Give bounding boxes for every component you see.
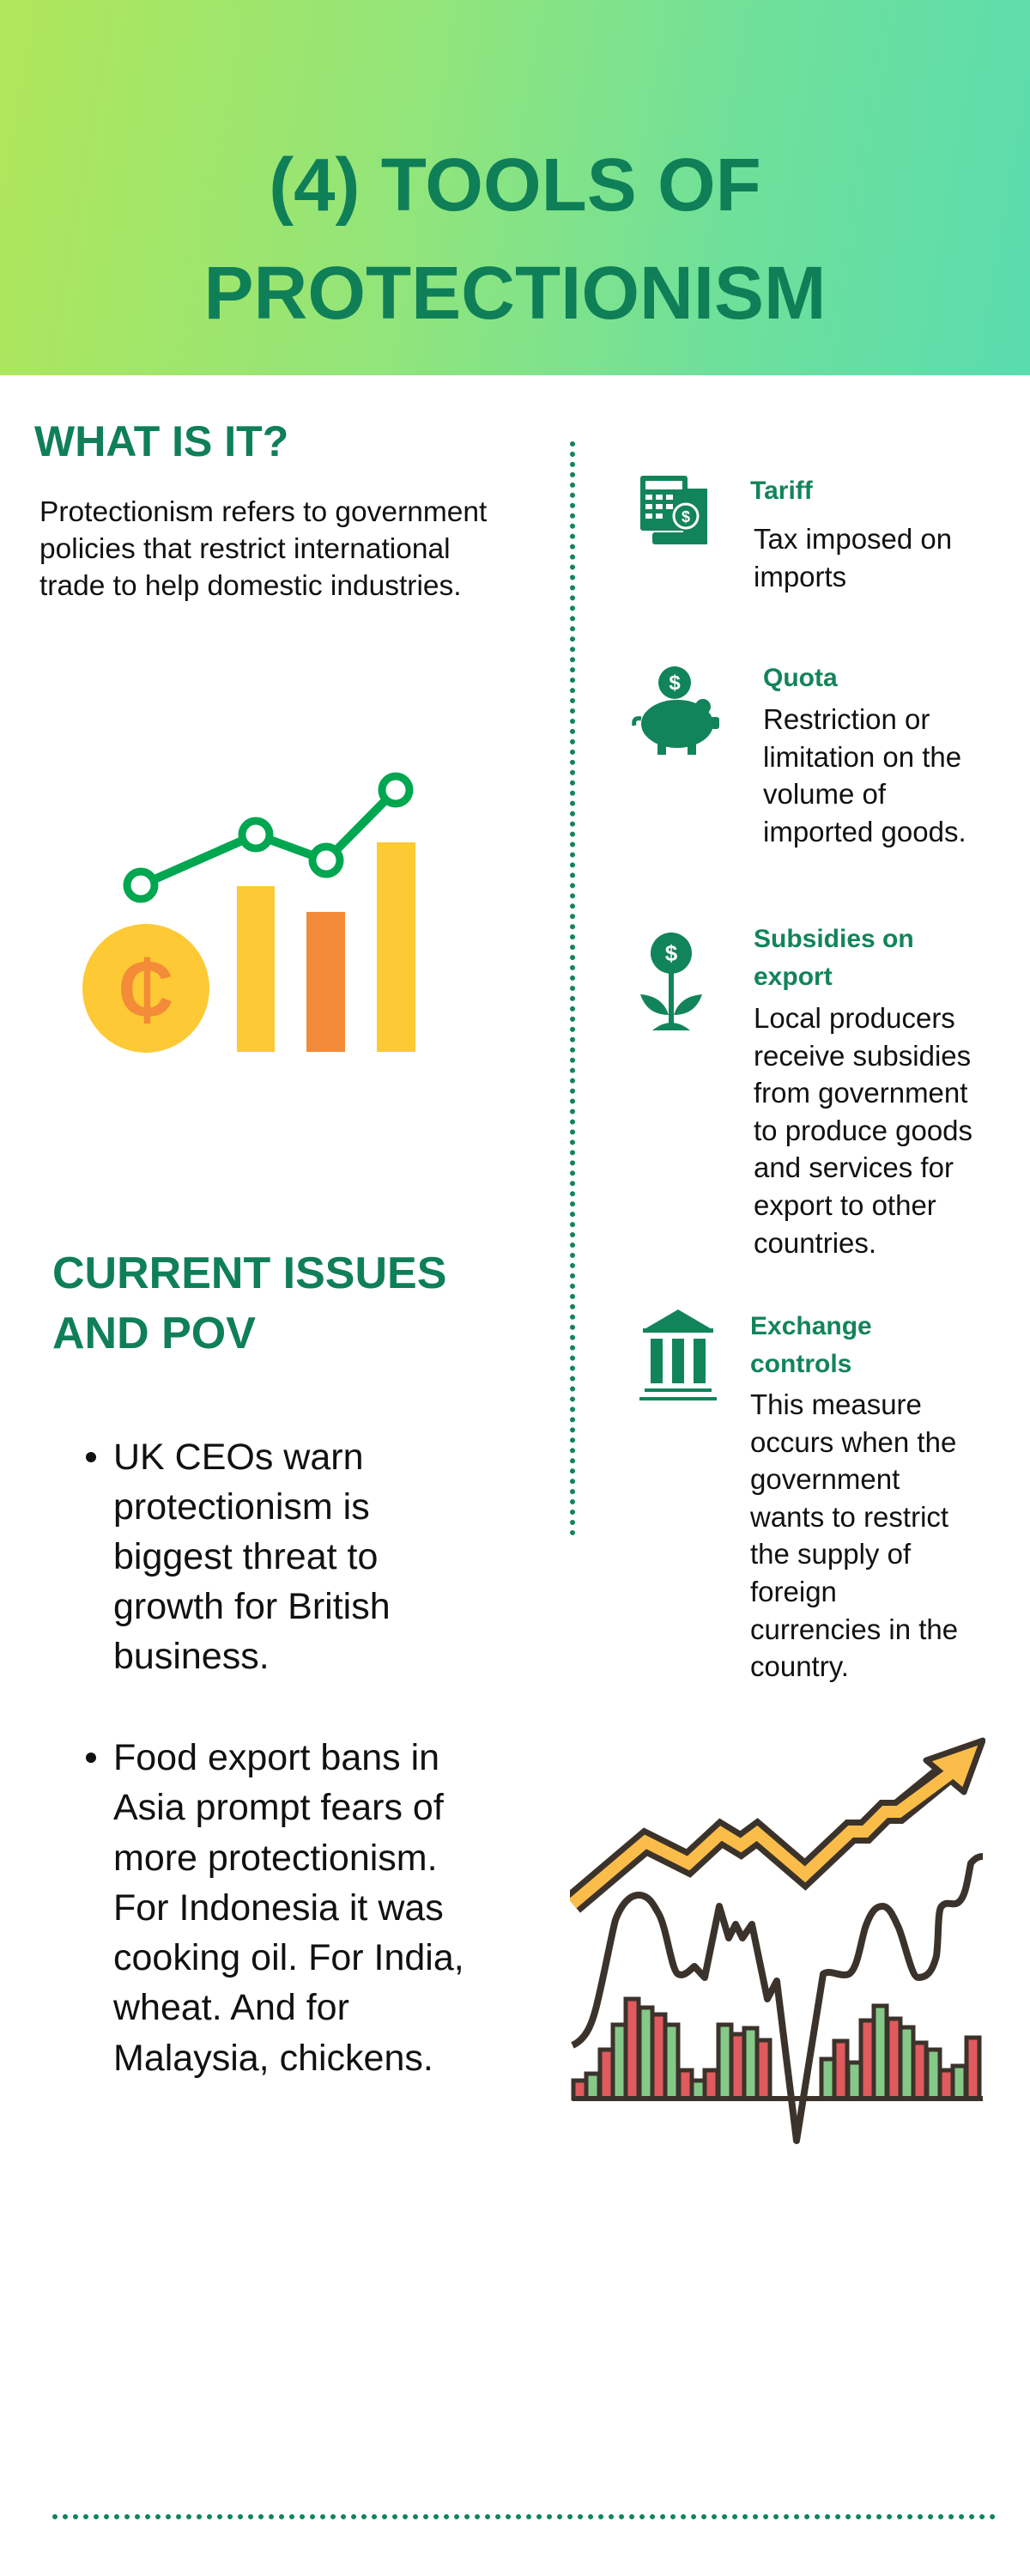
text: imported goods.: [763, 816, 966, 847]
item: quota: Quota: [763, 664, 838, 692]
item: tariff: Tariff: [750, 477, 813, 505]
title: (4) TOOLS OF: [269, 143, 761, 227]
heading: current issues and pov: CURRENT ISSUES: [52, 1249, 446, 1298]
text: country.: [750, 1650, 849, 1682]
icon: subsidies plant: $: [665, 940, 678, 966]
text: the supply of: [750, 1538, 911, 1570]
icon: tariff calculator: [640, 476, 707, 544]
item: exchange controls: controls: [750, 1350, 851, 1378]
item: exchange controls: Exchange: [750, 1312, 872, 1340]
icon: quota piggy bank: [632, 666, 719, 755]
text: countries.: [754, 1227, 876, 1259]
bullet: food export bans: Food export bans in: [113, 1737, 439, 1778]
text: This measure: [750, 1388, 922, 1420]
text: volume of: [763, 778, 886, 810]
illustration: growth chart with coin: [82, 773, 415, 1053]
text: definition: policies that restrict international: [39, 533, 451, 565]
heading: current issues and pov: AND POV: [52, 1309, 256, 1358]
text: receive subsidies: [754, 1040, 971, 1072]
text: limitation on the: [763, 740, 961, 773]
text: from government: [754, 1077, 967, 1109]
icon: exchange controls bank: [639, 1309, 717, 1400]
bullet: UK CEOs: growth for British: [113, 1586, 391, 1627]
item: quota: [763, 664, 966, 848]
bullet: food export bans: [86, 1737, 464, 2079]
icon: tariff calculator: $: [682, 508, 690, 526]
bullet: UK CEOs: biggest threat to: [113, 1536, 378, 1577]
text: export to other: [754, 1189, 936, 1221]
title: [203, 143, 826, 335]
icon: subsidies plant: [640, 933, 702, 1030]
text: Local producers: [754, 1002, 955, 1034]
divider: vertical dotted: [570, 441, 575, 1536]
text: Tax imposed on: [754, 523, 952, 555]
title: PROTECTIONISM: [203, 252, 826, 335]
bullet: food export bans: wheat. And for: [113, 1987, 349, 2028]
bullet: food export bans: For Indonesia it was: [113, 1887, 444, 1929]
bullet: food export bans: Asia prompt fears of: [113, 1787, 444, 1828]
text: currencies in the: [750, 1613, 958, 1645]
bullet: UK CEOs: business.: [113, 1636, 270, 1677]
bullet: UK CEOs: protectionism is: [113, 1486, 370, 1528]
bullet: UK CEOs: UK CEOs warn: [113, 1437, 364, 1478]
heading: what is it: WHAT IS IT?: [34, 417, 288, 465]
text: Restriction or: [763, 703, 930, 735]
text: definition: [39, 496, 488, 602]
bullet: food export bans: more protectionism.: [113, 1838, 438, 1879]
text: definition: Protectionism refers to government: [39, 496, 487, 528]
item: tariff: [750, 477, 952, 592]
item: subsidies on export: export: [754, 963, 833, 991]
item: exchange controls: [750, 1312, 958, 1682]
heading: current issues and pov: [52, 1249, 446, 1358]
text: occurs when the: [750, 1426, 956, 1458]
item: subsidies on export: Subsidies on: [754, 925, 914, 953]
divider: bottom dotted: [52, 2514, 996, 2519]
illustration: stock market chart: [570, 1738, 985, 2144]
icon: quota piggy bank: $: [669, 671, 681, 695]
text: foreign: [750, 1576, 837, 1607]
text: wants to restrict: [750, 1501, 948, 1533]
header banner: [0, 0, 1030, 375]
illustration: growth chart with coin: ₵: [118, 947, 173, 1033]
bullet: food export bans: cooking oil. For India,: [113, 1937, 464, 1978]
text: government: [750, 1463, 900, 1495]
item: subsidies on export: [754, 925, 972, 1259]
bullet: food export bans: Malaysia, chickens.: [113, 2038, 433, 2079]
text: and services for: [754, 1151, 954, 1183]
text: definition: trade to help domestic industries.: [39, 570, 462, 602]
text: to produce goods: [754, 1115, 972, 1146]
text: imports: [754, 561, 846, 592]
bullet: UK CEOs: [86, 1437, 391, 1677]
